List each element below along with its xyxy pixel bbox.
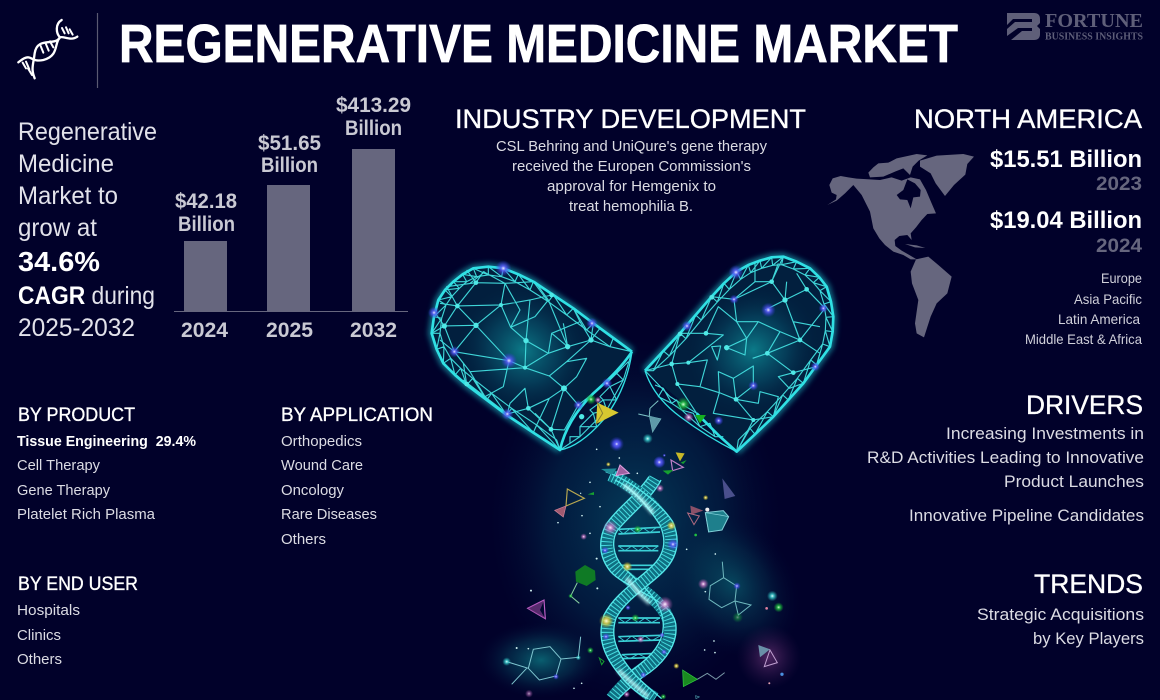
text block: CAGR summary: CAGR during — [18, 282, 155, 310]
list: by application — [281, 404, 433, 548]
bar chart: market size: Billion — [345, 117, 402, 140]
text block: north america: 2023 — [1096, 174, 1142, 195]
text block: north america: Europe — [1101, 270, 1142, 286]
text block: drivers — [867, 390, 1144, 525]
list: by product: Gene Therapy — [17, 482, 110, 499]
text block: CAGR summary: grow at — [18, 214, 97, 242]
map: Americas — [827, 154, 974, 337]
illustration: glowing particles — [502, 439, 784, 698]
list: by end user — [17, 573, 138, 668]
text block: CAGR summary: 2025-2032 — [18, 314, 135, 342]
text block: CAGR summary: Regenerative — [18, 118, 157, 146]
list: by application: BY APPLICATION — [281, 404, 433, 426]
header icon: DNA — [18, 20, 77, 78]
illustration: left capsule — [428, 258, 632, 451]
list: by product: BY PRODUCT — [18, 404, 135, 426]
list: by end user: Hospitals — [17, 602, 80, 619]
illustration: DNA helix — [599, 472, 679, 700]
text block: industry development: INDUSTRY DEVELOPMENT — [455, 104, 806, 134]
logo: Fortune Business Insights — [1007, 10, 1143, 42]
text block: trends: Strategic Acquisitions — [977, 605, 1144, 624]
text block: trends: TRENDS — [1034, 569, 1143, 599]
text block: CAGR summary — [18, 118, 157, 342]
text block: industry development: received the Europen Commission's — [512, 158, 751, 175]
title: REGENERATIVE MEDICINE MARKET — [119, 14, 958, 74]
list: by product: Platelet Rich Plasma — [17, 506, 156, 523]
text block: north america: 2024 — [1096, 236, 1142, 257]
bar chart: market size: 2025 — [266, 319, 313, 342]
illustration: debris between capsules — [586, 394, 619, 424]
text block: industry development: treat hemophilia B. — [569, 198, 693, 215]
list: by application: Others — [281, 531, 326, 548]
header divider — [96, 13, 98, 88]
text block: drivers: DRIVERS — [1026, 390, 1143, 420]
bar chart: market size: 2032 — [350, 319, 397, 342]
logo: Fortune Business Insights: FORTUNE — [1045, 10, 1143, 32]
list: by end user: BY END USER — [18, 573, 138, 595]
text block: north america: $19.04 Billion — [990, 207, 1142, 234]
illustration: right capsule — [638, 256, 848, 468]
list: by application: Oncology — [281, 482, 344, 499]
list: by application: Wound Care — [281, 457, 363, 474]
bar chart: market size: $413.29 — [336, 94, 411, 117]
text block: industry development: CSL Behring and UniQure's gene therapy — [496, 138, 767, 155]
text block: CAGR summary: Market to — [18, 182, 118, 210]
text block: trends: by Key Players — [1033, 629, 1144, 648]
list: by product: Tissue Engineering 29.4% — [17, 434, 196, 450]
text block: north america: $15.51 Billion — [990, 146, 1142, 173]
list: by application: Rare Diseases — [281, 506, 377, 523]
background glows — [479, 340, 828, 700]
bar chart: market size: $42.18 — [175, 190, 237, 213]
text block: north america: NORTH AMERICA — [914, 104, 1142, 134]
text block: drivers: R&D Activities Leading to Innovative — [867, 448, 1144, 467]
text block: north america: Middle East & Africa — [1025, 331, 1142, 347]
illustration: floating molecules — [507, 452, 777, 699]
list: by product — [17, 404, 196, 523]
text block: trends — [977, 569, 1144, 648]
list: by product: Cell Therapy — [17, 457, 100, 474]
bar chart: market size: $51.65 — [258, 132, 321, 155]
bar chart: market size: 2024 — [181, 319, 228, 342]
text block: CAGR summary: Medicine — [18, 150, 114, 178]
bar chart: market size: Billion — [178, 213, 235, 236]
bar chart: market size: Billion — [261, 154, 318, 177]
text block: drivers: Product Launches — [1004, 472, 1144, 491]
text block: industry development — [455, 104, 806, 215]
bar chart: market size — [174, 94, 411, 342]
text block: CAGR summary: 34.6% — [18, 246, 100, 277]
logo: Fortune Business Insights: BUSINESS INSIGHTS — [1045, 32, 1143, 42]
text block: north america: Asia Pacific — [1074, 291, 1142, 307]
text block: north america: Latin America — [1058, 311, 1140, 327]
list: by end user: Clinics — [17, 627, 61, 644]
list: by end user: Others — [17, 651, 62, 668]
text block: industry development: approval for Hemgenix to — [547, 178, 716, 195]
text block: north america — [914, 104, 1142, 347]
text block: drivers: Increasing Investments in — [946, 424, 1144, 443]
list: by application: Orthopedics — [281, 433, 362, 450]
text block: drivers: Innovative Pipeline Candidates — [909, 506, 1144, 525]
